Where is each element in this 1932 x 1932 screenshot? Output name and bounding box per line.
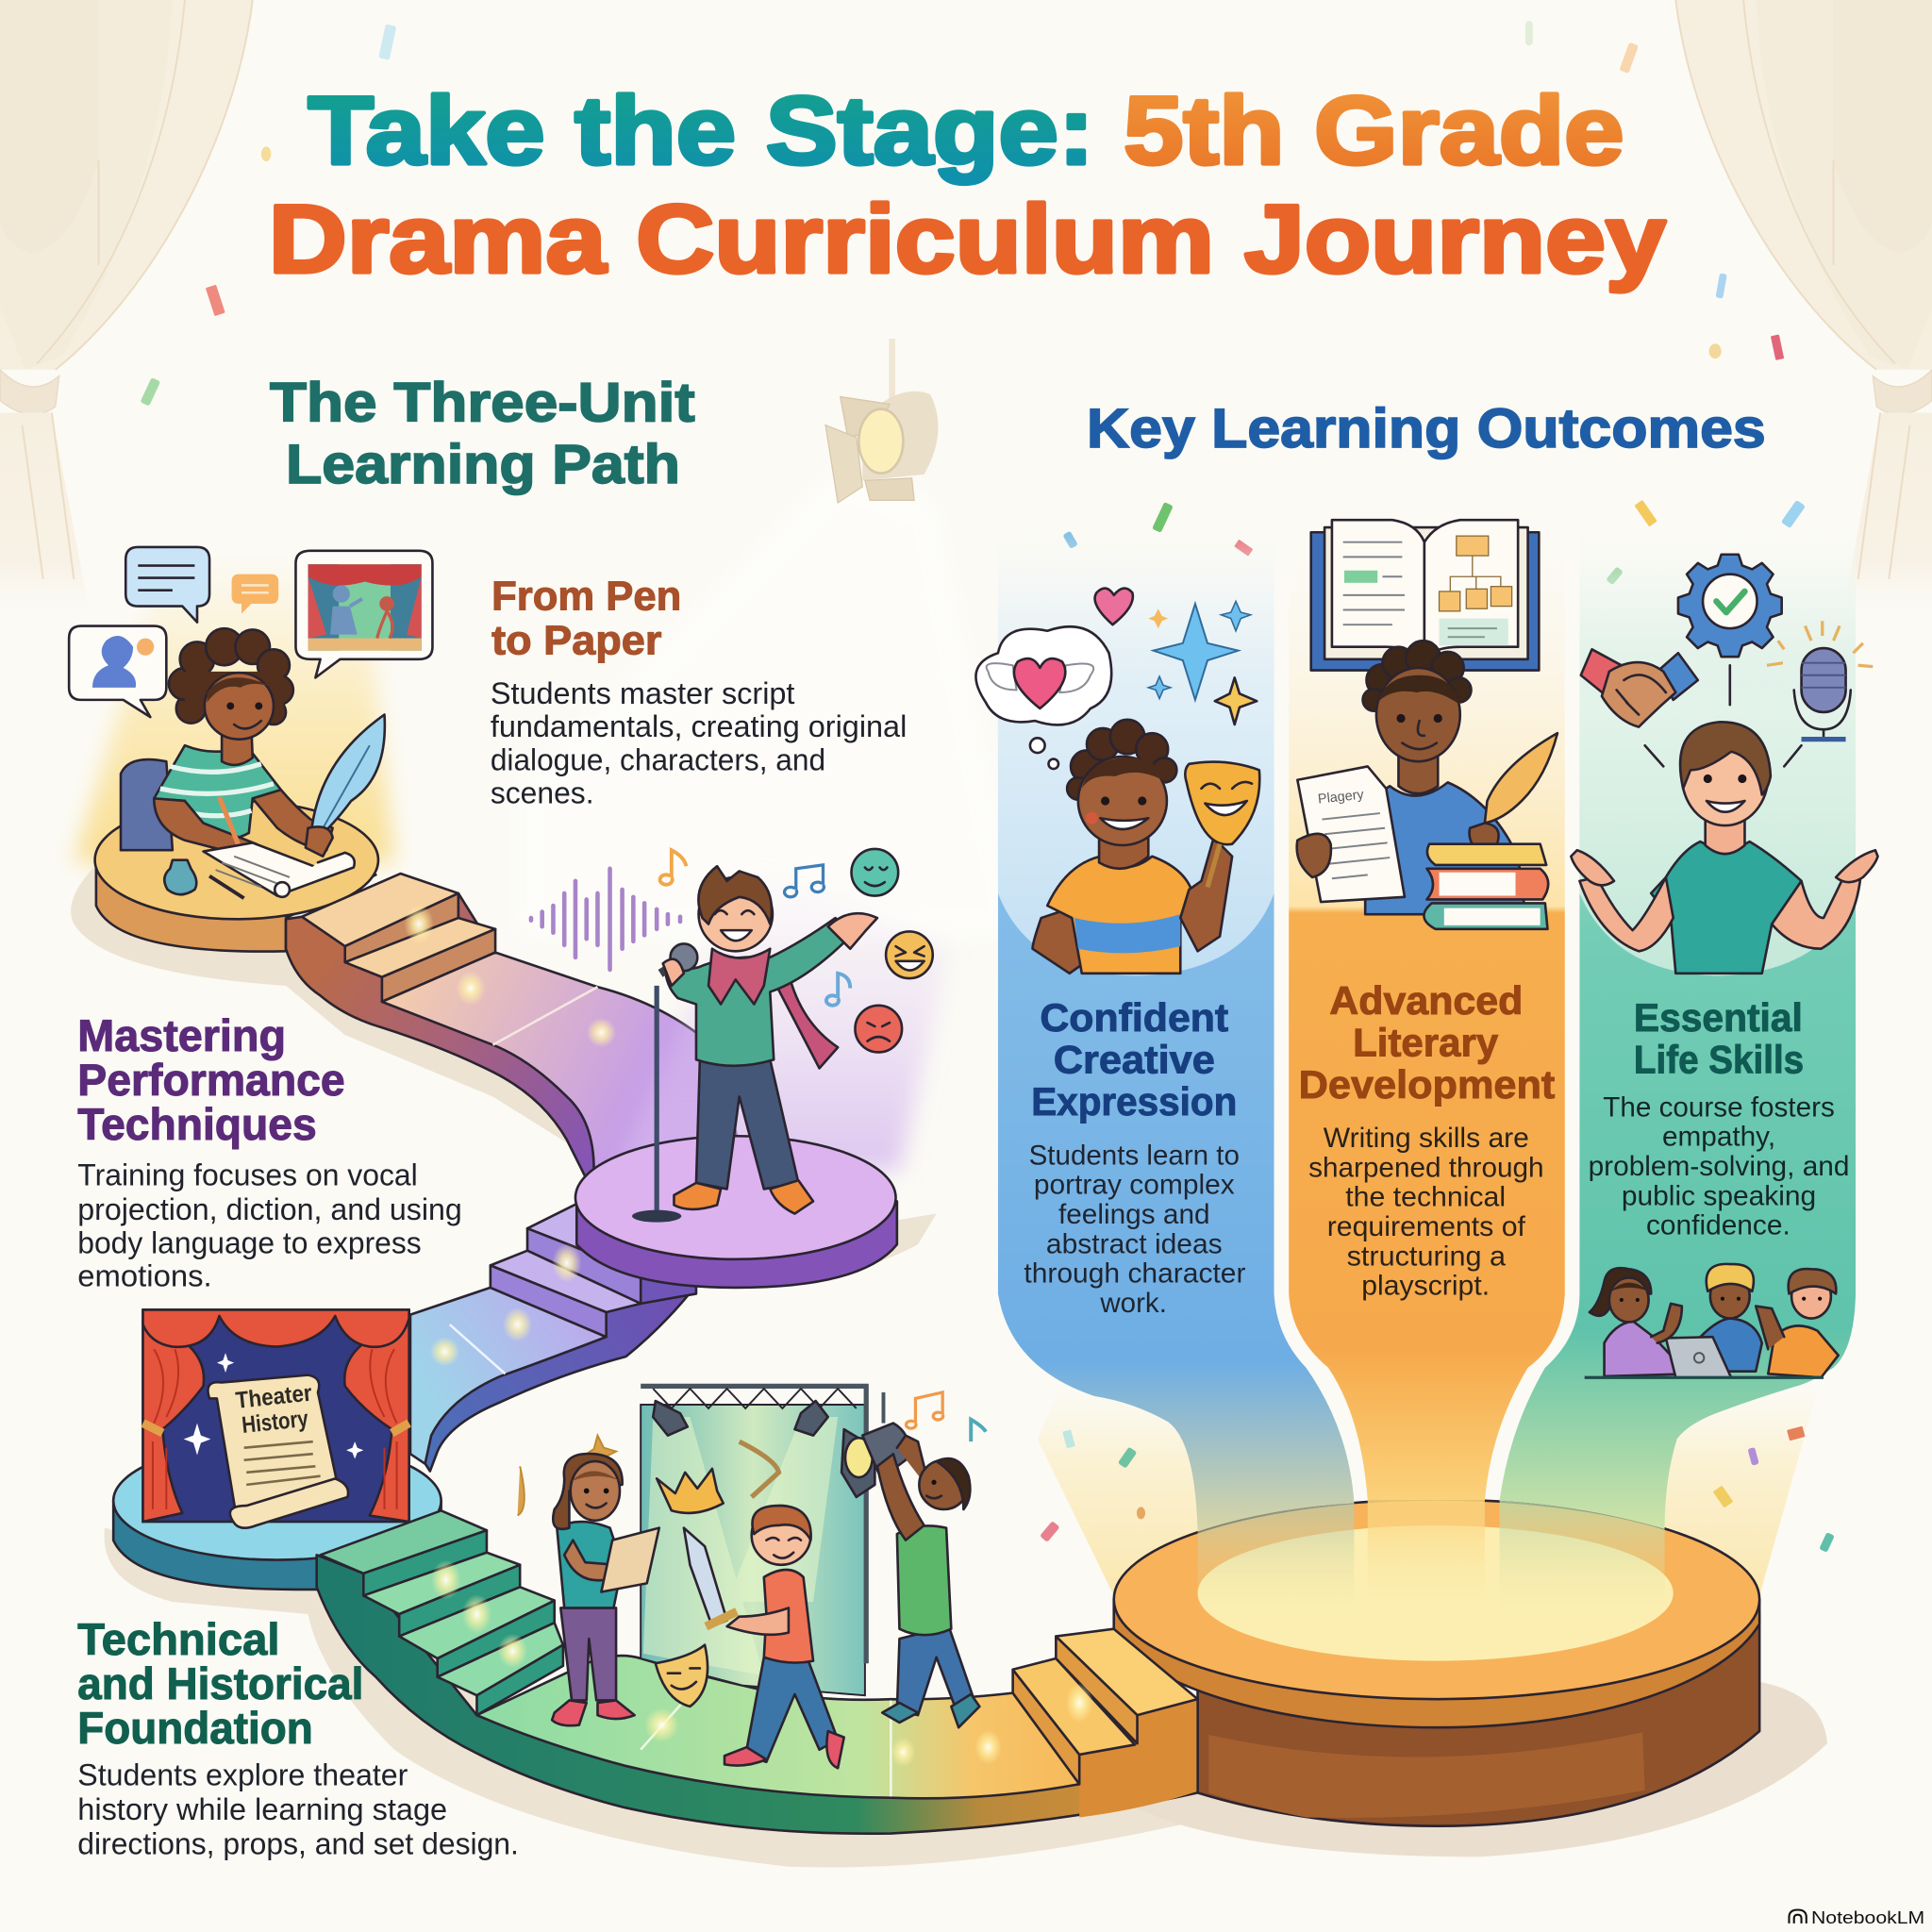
text: performance description: emotions. — [77, 1258, 212, 1293]
icon: open book — [1311, 520, 1539, 671]
text: life skills description — [1589, 1091, 1849, 1241]
light from columns falling on stage — [1198, 1501, 1665, 1614]
heading: Essential Life Skills — [1634, 995, 1804, 1082]
character: girl with script — [552, 1454, 659, 1725]
text: performance description: Training focuses on vocal — [77, 1157, 418, 1191]
backdrop and lighting truss — [641, 1386, 866, 1695]
heading: Advanced Literary Development — [1299, 978, 1555, 1107]
heading: Technical and Historical Foundation: Foundation — [77, 1703, 313, 1753]
illustration: students collaborating at laptop — [1585, 1264, 1839, 1377]
heading: Technical and Historical Foundation: and Historical — [77, 1658, 363, 1708]
panel: learning path unit 3 — [105, 1441, 1198, 1868]
illustration: waveform and emotion icons — [531, 849, 933, 1052]
text: life skills description: confidence. — [1646, 1210, 1790, 1241]
confetti — [141, 21, 1806, 585]
text: literary development description: playscript. — [1361, 1271, 1490, 1302]
heading: Mastering Performance Techniques: Techniques — [77, 1099, 317, 1149]
text: creative expression description: abstract ideas — [1046, 1228, 1223, 1259]
confetti near stage — [1040, 1426, 1835, 1553]
text: literary development description: structuring a — [1347, 1241, 1506, 1272]
stairs and ramp to history — [410, 1203, 696, 1472]
stage base — [1198, 1614, 1759, 1826]
text: performance description: projection, diction, and using — [77, 1191, 462, 1226]
text: literary development description — [1308, 1123, 1544, 1302]
illustration: theater history stage: Theater — [235, 1381, 313, 1414]
stairs and ramp to performance — [286, 874, 740, 1194]
heading: Mastering Performance Techniques: Mastering — [77, 1010, 286, 1060]
heading: Essential Life Skills: Essential — [1634, 995, 1803, 1040]
shadow under platform — [641, 1214, 937, 1289]
final stage — [1038, 1500, 1827, 1857]
illustration: performer at microphone — [632, 866, 877, 1223]
heading: Advanced Literary Development: Literary — [1353, 1020, 1499, 1064]
text: performance description — [77, 1157, 462, 1293]
heading: From Pen to Paper: to Paper — [491, 619, 662, 664]
section heading: learning path: Learning Path — [286, 434, 680, 495]
text: creative expression description: portray complex — [1034, 1170, 1235, 1201]
heading: Technical and Historical Foundation — [77, 1614, 363, 1753]
character: student with script and quill: Plagery — [1317, 787, 1365, 808]
character: student with open arms — [1571, 722, 1878, 974]
heading: Mastering Performance Techniques — [77, 1010, 345, 1149]
heading: From Pen to Paper: From Pen — [491, 575, 681, 620]
panel: outcome column blue — [975, 530, 1354, 1532]
section heading: learning path — [270, 373, 695, 495]
text: creative expression description: feelings and — [1058, 1199, 1210, 1230]
spotlight on writer — [74, 555, 394, 862]
props: crown, ribbon, mask — [656, 1441, 778, 1707]
text: creative expression description: through character — [1024, 1258, 1245, 1290]
text: creative expression description: work. — [1099, 1288, 1167, 1319]
icon: microphone — [1767, 621, 1873, 740]
main title — [269, 77, 1666, 293]
text: creative expression description: Students learn to — [1029, 1140, 1240, 1171]
character: boy with toy sword — [684, 1506, 844, 1768]
performance platform — [575, 1136, 897, 1288]
text: literary development description: requirements of — [1327, 1211, 1526, 1242]
stage shadow — [1038, 1682, 1827, 1857]
stage top — [1114, 1500, 1759, 1699]
panel: learning path unit 1 — [71, 555, 740, 1194]
section heading: outcomes: Key Learning Outcomes — [1087, 398, 1766, 459]
text: literary development description: sharpened through — [1308, 1152, 1544, 1183]
icon: handshake — [1581, 649, 1698, 727]
icon group: speech bubbles — [69, 547, 432, 717]
text: from pen to paper description: Students master script — [491, 675, 794, 710]
curtain: right — [1675, 0, 1932, 628]
icon: gear with check — [1678, 555, 1782, 657]
text: literary development description: Writing skills are — [1324, 1123, 1529, 1154]
heading: Confident Creative Expression — [1031, 995, 1237, 1124]
text: technical description: history while learning stage — [77, 1791, 447, 1826]
writing platform — [95, 801, 378, 952]
text: technical description: directions, props, and set design. — [77, 1826, 519, 1861]
text: from pen to paper description: fundamentals, creating original — [491, 708, 907, 743]
text: creative expression description — [1024, 1140, 1245, 1319]
heading: Technical and Historical Foundation: Technical — [77, 1614, 279, 1664]
text: life skills description: empathy, — [1662, 1122, 1775, 1153]
heading: Advanced Literary Development: Development — [1299, 1062, 1555, 1107]
panel: learning path unit 2 — [410, 862, 949, 1472]
stage floor and stairs — [317, 1510, 1198, 1834]
main title: Drama Curriculum Journey — [269, 186, 1666, 293]
heading: Essential Life Skills: Life Skills — [1634, 1038, 1804, 1082]
illustration: theater history stage: History — [241, 1407, 309, 1439]
heading: Confident Creative Expression: Creative — [1054, 1038, 1215, 1082]
icon: heart and sparkles — [1095, 589, 1257, 724]
panel: outcome column orange — [1289, 492, 1565, 1501]
text: from pen to paper description: scenes. — [491, 775, 594, 810]
text: technical description — [77, 1757, 519, 1861]
history platform — [113, 1441, 441, 1590]
text: life skills description: public speaking — [1622, 1180, 1816, 1211]
text: literary development description: the technical — [1345, 1182, 1506, 1213]
shadow under platform — [71, 862, 616, 1158]
text: life skills description: problem-solving, and — [1589, 1151, 1849, 1182]
decorative radiating marks — [1645, 665, 1802, 766]
heading: Mastering Performance Techniques: Performance — [77, 1055, 345, 1105]
light sparkles along the path — [404, 905, 1093, 1767]
main title: 5th Grade — [1124, 77, 1624, 185]
text: from pen to paper description: dialogue, characters, and — [491, 741, 825, 776]
illustration: theater history stage — [143, 1309, 409, 1528]
logo: NotebookLM: NotebookLM — [1811, 1907, 1924, 1927]
text: life skills description: The course fosters — [1603, 1091, 1835, 1123]
column glow flanks — [1038, 1386, 1819, 1595]
panel: outcome column teal — [1500, 530, 1878, 1529]
heading: From Pen to Paper — [491, 575, 681, 664]
icon: thought cloud with winged heart — [975, 626, 1111, 769]
character: student adjusting light — [841, 1392, 979, 1727]
heading: Confident Creative Expression: Confident — [1040, 995, 1228, 1040]
icon: overhead spotlight — [825, 339, 939, 503]
heading: Confident Creative Expression: Expression — [1031, 1079, 1237, 1124]
curtain: left — [0, 0, 253, 628]
character: student with mask — [1033, 720, 1259, 974]
text: technical description: Students explore theater — [77, 1757, 408, 1792]
spotlight beam wash — [518, 468, 1023, 937]
illustration: backstage set with three students — [518, 1386, 986, 1768]
section heading: learning path: The Three-Unit — [270, 373, 695, 434]
heading: Advanced Literary Development: Advanced — [1329, 978, 1523, 1023]
spotlight on performer — [616, 862, 949, 1171]
main title: Take the Stage: — [308, 77, 1094, 185]
character: student with script and quill — [1297, 641, 1557, 929]
text: from pen to paper description — [491, 675, 907, 810]
shadow under path — [105, 1528, 1180, 1868]
text: performance description: body language to express — [77, 1224, 422, 1259]
stage rim — [1114, 1599, 1759, 1727]
floating notes — [906, 1392, 943, 1428]
illustration: writing student — [121, 628, 385, 898]
